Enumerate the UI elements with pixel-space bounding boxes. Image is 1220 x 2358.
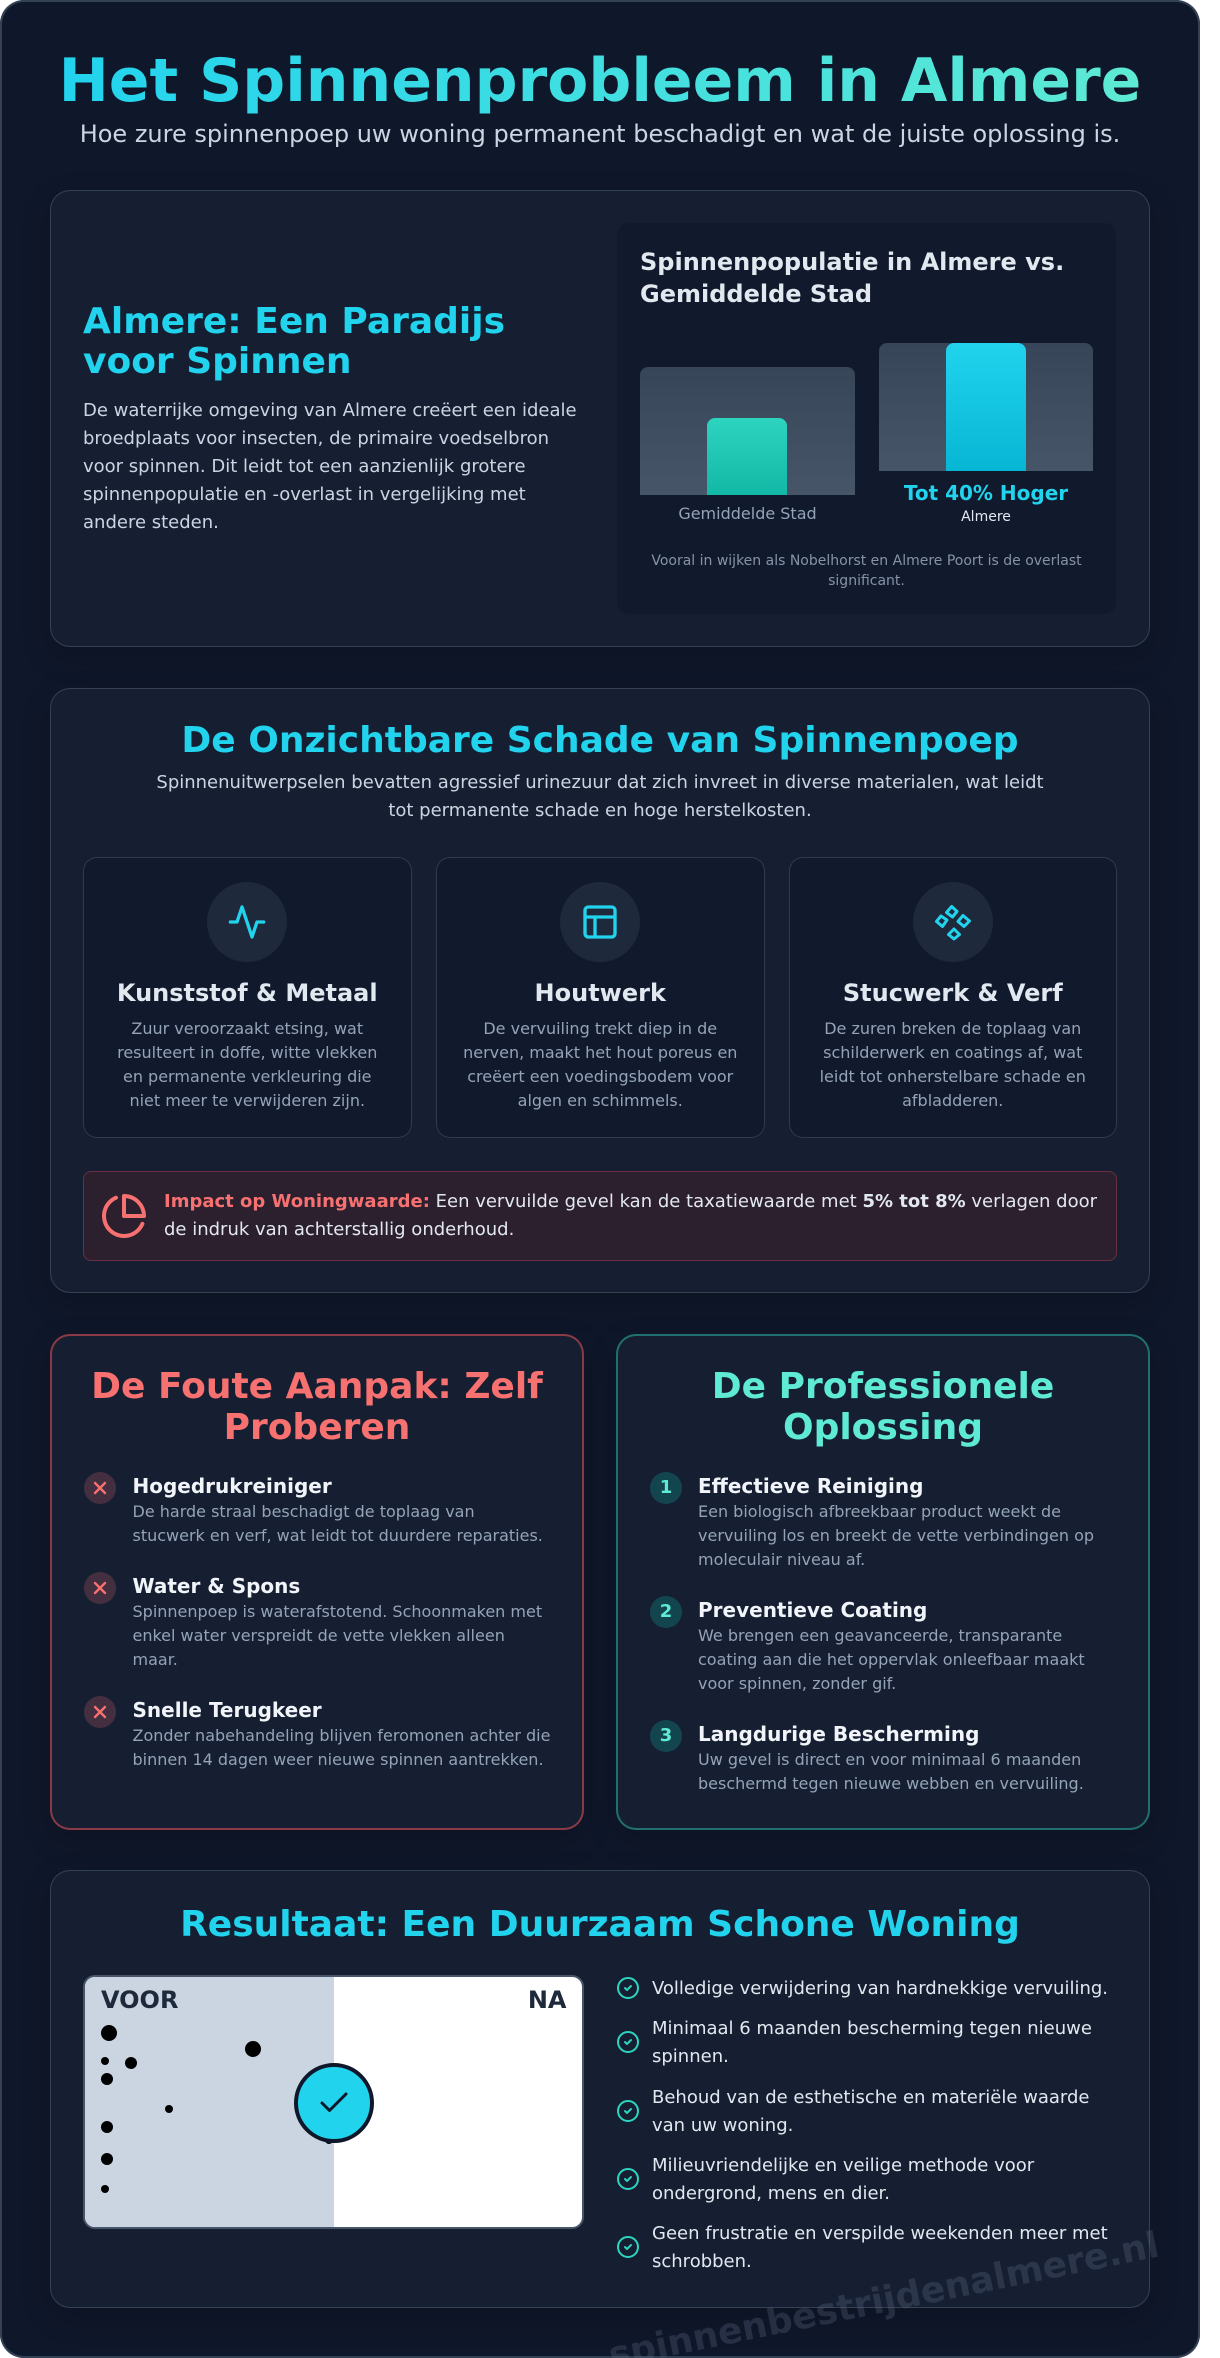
item text: De harde straal beschadigt de toplaag van [132,1502,475,1521]
card text: en permanente verkleuring die [123,1067,372,1086]
number badge [650,1472,682,1504]
step text: vervuiling los en breekt de vette verbindingen op [698,1526,1094,1545]
card text: De vervuiling trekt diep in de [483,1019,717,1038]
card text: nerven, maakt het hout poreus en [463,1043,737,1062]
number badge: 3 [660,1725,672,1746]
icon: x [84,1572,116,1604]
text: schade intro [156,772,1044,821]
before side [85,1977,334,2227]
label: almere: Almere [961,509,1011,525]
item text: binnen 14 dagen weer nieuwe spinnen aantrekken. [132,1750,544,1769]
panel: onzichtbare schade [50,688,1150,1293]
item text: Spinnenpoep is waterafstotend. Schoonmaken met [132,1602,542,1621]
dirt spots [101,2025,332,2193]
item: snelle terugkeer [84,1696,550,1769]
step text: coating aan die het oppervlak onleefbaar maakt [698,1650,1085,1669]
item title: Water & Spons [132,1574,300,1598]
card text [117,1019,377,1110]
item text: enkel water verspreidt de vette vlekken alleen [132,1626,505,1645]
card: stucwerk en verf [788,857,1117,1138]
chart footnote [651,553,1082,589]
heading: schade: De Onzichtbare Schade van Spinnenpoep [181,720,1019,760]
step text: Uw gevel is direct en voor minimaal 6 maanden [698,1750,1081,1769]
card text: algen en schimmels. [518,1091,683,1110]
text: intro [83,400,577,533]
item: water en spons [84,1572,542,1669]
number badge: 2 [660,1601,672,1622]
number badge [650,1720,682,1752]
step text: We brengen een geavanceerde, transparante [698,1626,1062,1645]
heading: resultaat: Resultaat: Een Duurzaam Schone Woning [180,1904,1020,1944]
card text: resulteert in doffe, witte vlekken [117,1043,377,1062]
before and after graphic [83,1975,584,2229]
panel: Almere paradijs [50,190,1150,647]
callout text: de indruk van achterstallig onderhoud. [164,1219,514,1240]
bar track: almere [879,343,1093,471]
text: intro: voor spinnen. Dit leidt tot een aanzienlijk grotere [83,456,526,477]
item text [132,1602,542,1669]
heading: Almere [83,300,505,382]
chart heading: Spinnenpopulatie in Almere vs. [640,248,1064,276]
step title: Langdurige Bescherming [698,1722,979,1746]
card title: Stucwerk & Verf [843,979,1063,1007]
benefits list [617,1977,1108,2272]
icon: check badge [294,2063,374,2143]
bar: gemiddelde stad [707,418,787,495]
heading: oplossing [712,1366,1054,1448]
card text [820,1019,1086,1110]
benefit 3 [617,2086,1090,2136]
callout text: Impact op Woningwaarde: Een vervuilde gevel kan de taxatiewaarde met 5% tot 8% verlagen door [164,1191,1097,1212]
card title: Kunststof & Metaal [117,979,378,1007]
step text: moleculair niveau af. [698,1550,865,1569]
card text: schilderwerk en coatings af, wat [823,1043,1082,1062]
heading: oplossing: De Professionele [712,1366,1054,1407]
panel: foute aanpak [50,1334,584,1830]
chart footnote: significant. [828,573,905,589]
benefit 1: Volledige verwijdering van hardnekkige vervuiling. [652,1978,1108,1999]
benefit 2: spinnen. [652,2046,729,2067]
text: schade intro: tot permanente schade en hoge herstelkosten. [388,800,812,821]
chart footnote: Vooral in wijken als Nobelhorst en Almere Poort is de overlast [651,553,1082,569]
label: gemiddelde stad: Gemiddelde Stad [678,504,817,523]
icon: pie chart [102,1194,146,1238]
callout: impact op woningwaarde [83,1171,1117,1261]
benefit 2: Minimaal 6 maanden bescherming tegen nieuwe [652,2018,1092,2039]
step text: Een biologisch afbreekbaar product weekt de [698,1502,1061,1521]
chart heading [640,248,1064,308]
number badge [650,1596,682,1628]
item text: maar. [132,1650,178,1669]
item text: Zonder nabehandeling blijven feromonen achter die [132,1726,550,1745]
subtitle: Hoe zure spinnenpoep uw woning permanent beschadigt en wat de juiste oplossing is. [80,120,1120,148]
card text: afbladderen. [902,1091,1003,1110]
number badge: 1 [660,1477,672,1498]
step 2 [650,1596,1085,1693]
benefit 3: van uw woning. [652,2115,793,2136]
card title: Houtwerk [535,979,666,1007]
icon: x [84,1696,116,1728]
panel: resultaat [50,1870,1150,2308]
label: voor: VOOR [101,1986,178,2014]
step text [698,1626,1085,1693]
step text [698,1502,1094,1569]
benefit 5 [617,2223,1108,2272]
item text: stucwerk en verf, wat leidt tot duurdere reparaties. [132,1526,543,1545]
benefit 3: Behoud van de esthetische en materiële waarde [652,2086,1090,2108]
item title: Snelle Terugkeer [132,1698,322,1722]
chart heading: Gemiddelde Stad [640,280,872,308]
card text: creëert een voedingsbodem voor [467,1067,733,1086]
card text: niet meer te verwijderen zijn. [129,1091,365,1110]
heading: foute aanpak: De Foute Aanpak: Zelf [91,1366,543,1407]
benefit 5: schrobben. [652,2251,752,2272]
step text [698,1750,1084,1793]
benefit 4: ondergrond, mens en dier. [652,2183,890,2204]
card text [463,1019,737,1110]
item: hogedrukreiniger [84,1472,543,1545]
step title: Effectieve Reiniging [698,1474,923,1498]
card: kunststof en metaal [83,857,412,1138]
heading: foute aanpak: Proberen [224,1406,410,1448]
panel: professionele oplossing [616,1334,1150,1830]
title: Het Spinnenprobleem in Almere [59,46,1141,116]
benefit 2 [617,2018,1092,2067]
step text: voor spinnen, zonder gif. [698,1674,896,1693]
heading: oplossing: Oplossing [783,1406,983,1448]
text: intro: De waterrijke omgeving van Almere creëert een ideale [83,400,577,421]
callout text [164,1191,1098,1240]
card text: leidt tot onherstelbare schade en [820,1067,1086,1086]
icon: component [912,882,992,962]
icon: activity [207,882,287,962]
text: intro: andere steden. [83,512,219,533]
benefit 4 [617,2155,1034,2204]
heading: Almere: Almere: Een Paradijs [83,300,505,342]
card text: De zuren breken de toplaag van [824,1019,1081,1038]
card text: Zuur veroorzaakt etsing, wat [131,1019,363,1038]
card: houtwerk [436,857,764,1138]
bar track: gemiddelde stad [640,367,855,495]
step title: Preventieve Coating [698,1598,927,1622]
benefit 4: Milieuvriendelijke en veilige methode voor [652,2155,1034,2176]
text: intro: spinnenpopulatie en -overlast in vergelijking met [83,484,526,505]
heading: Almere: voor Spinnen [83,340,352,382]
value label: tot 40% hoger: Tot 40% Hoger [904,481,1068,505]
icon: layout [560,882,640,962]
item text [132,1502,543,1545]
item text [132,1726,550,1769]
step text: beschermd tegen nieuwe webben en vervuiling. [698,1774,1084,1793]
label: na: NA [528,1986,566,2014]
item title: Hogedrukreiniger [132,1474,332,1498]
text: schade intro: Spinnenuitwerpselen bevatten agressief urinezuur dat zich invreet in diverse materialen, wat leidt [156,772,1044,792]
step 3 [650,1720,1084,1793]
panel: population chart [617,223,1116,614]
step 1 [650,1472,1094,1569]
bar: almere [946,343,1026,471]
heading: foute aanpak [91,1366,544,1448]
benefit 5: Geen frustratie en verspilde weekenden meer met [652,2223,1108,2244]
icon: x [84,1472,116,1504]
text: intro: broedplaats voor insecten, de primaire voedselbron [83,428,549,449]
